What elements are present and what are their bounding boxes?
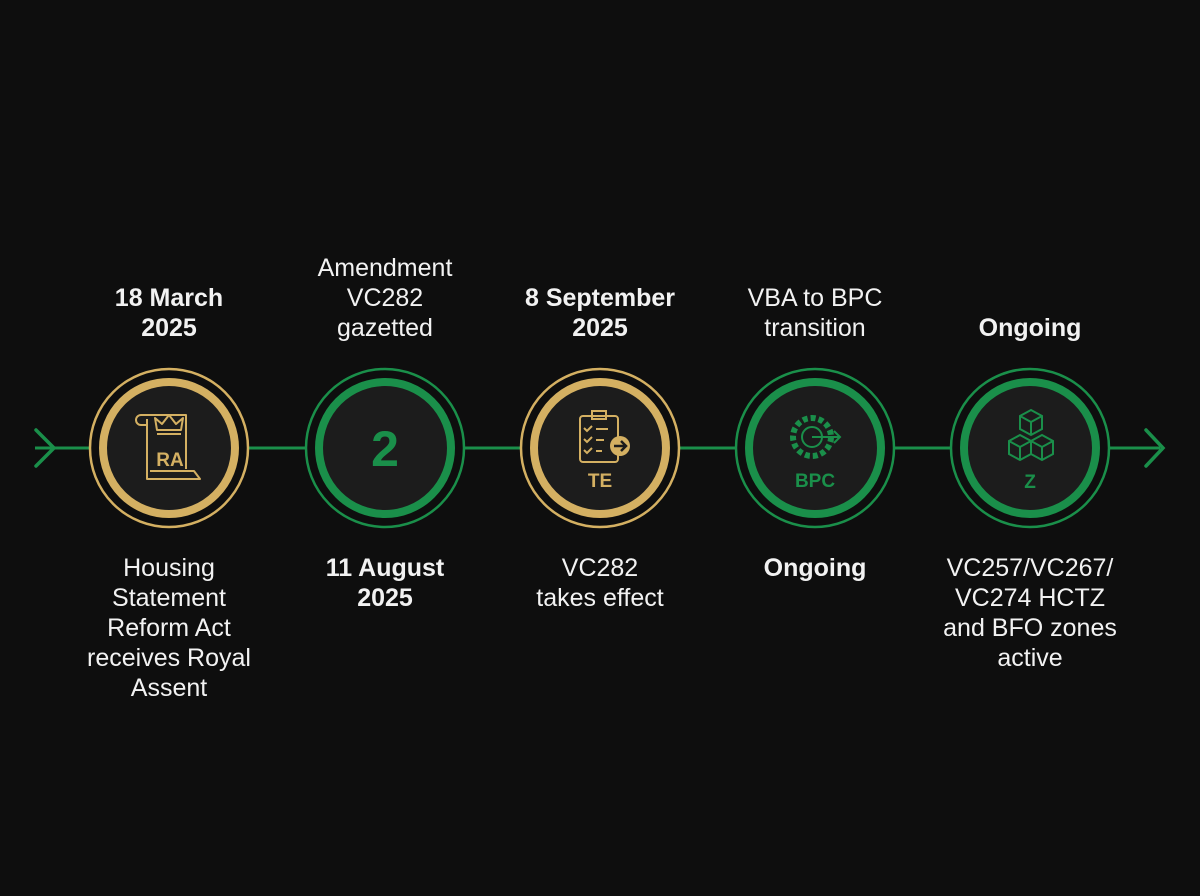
timeline line <box>35 430 1163 466</box>
node 1: royal assent: RA <box>156 450 184 471</box>
label: zones active: VC274 HCTZ <box>955 584 1105 612</box>
node 4: BPC <box>736 369 894 527</box>
label: Amendment gazetted: gazetted <box>337 314 433 342</box>
label: Royal Assent description: receives Royal <box>87 644 251 672</box>
label: Royal Assent description <box>87 554 251 702</box>
label: VBA to BPC: VBA to BPC <box>748 284 882 312</box>
label: 18 March 2025 <box>115 284 223 342</box>
label: Ongoing bottom: Ongoing <box>764 554 866 582</box>
label: VC282 takes effect <box>536 554 664 612</box>
label: Amendment gazetted: VC282 <box>347 284 423 312</box>
node 2 <box>306 369 464 527</box>
label: VBA to BPC <box>748 284 882 342</box>
label: zones active: and BFO zones <box>943 614 1117 642</box>
label: VC282 takes effect: takes effect <box>536 584 664 612</box>
label: 18 March 2025: 2025 <box>141 314 197 342</box>
label: Royal Assent description: Statement <box>112 584 226 612</box>
label: 8 September 2025: 8 September <box>525 284 675 312</box>
label: zones active <box>943 554 1117 672</box>
node 2: 2 <box>371 421 399 477</box>
label: Amendment gazetted: Amendment <box>318 254 452 282</box>
label: 8 September 2025: 2025 <box>572 314 628 342</box>
label: zones active: active <box>997 644 1063 672</box>
label: 11 August 2025: 11 August <box>326 554 444 582</box>
node 4: BPC: BPC <box>795 471 835 492</box>
label: VC282 takes effect: VC282 <box>562 554 638 582</box>
label: Amendment gazetted <box>318 254 452 342</box>
label: 8 September 2025 <box>525 284 675 342</box>
label: Royal Assent description: Reform Act <box>107 614 231 642</box>
node 5: zones <box>951 369 1109 527</box>
label: 11 August 2025: 2025 <box>357 584 413 612</box>
label: VBA to BPC: transition <box>764 314 866 342</box>
label: zones active: VC257/VC267/ <box>947 554 1113 582</box>
label: 18 March 2025: 18 March <box>115 284 223 312</box>
label: Royal Assent description: Assent <box>131 674 207 702</box>
node 3: takes effect: TE <box>588 471 612 492</box>
node 5: zones: Z <box>1024 472 1036 493</box>
label: 11 August 2025 <box>326 554 444 612</box>
label: Royal Assent description: Housing <box>123 554 215 582</box>
label: Ongoing top: Ongoing <box>979 314 1081 342</box>
node 3: takes effect <box>521 369 679 527</box>
node 1: royal assent <box>90 369 248 527</box>
